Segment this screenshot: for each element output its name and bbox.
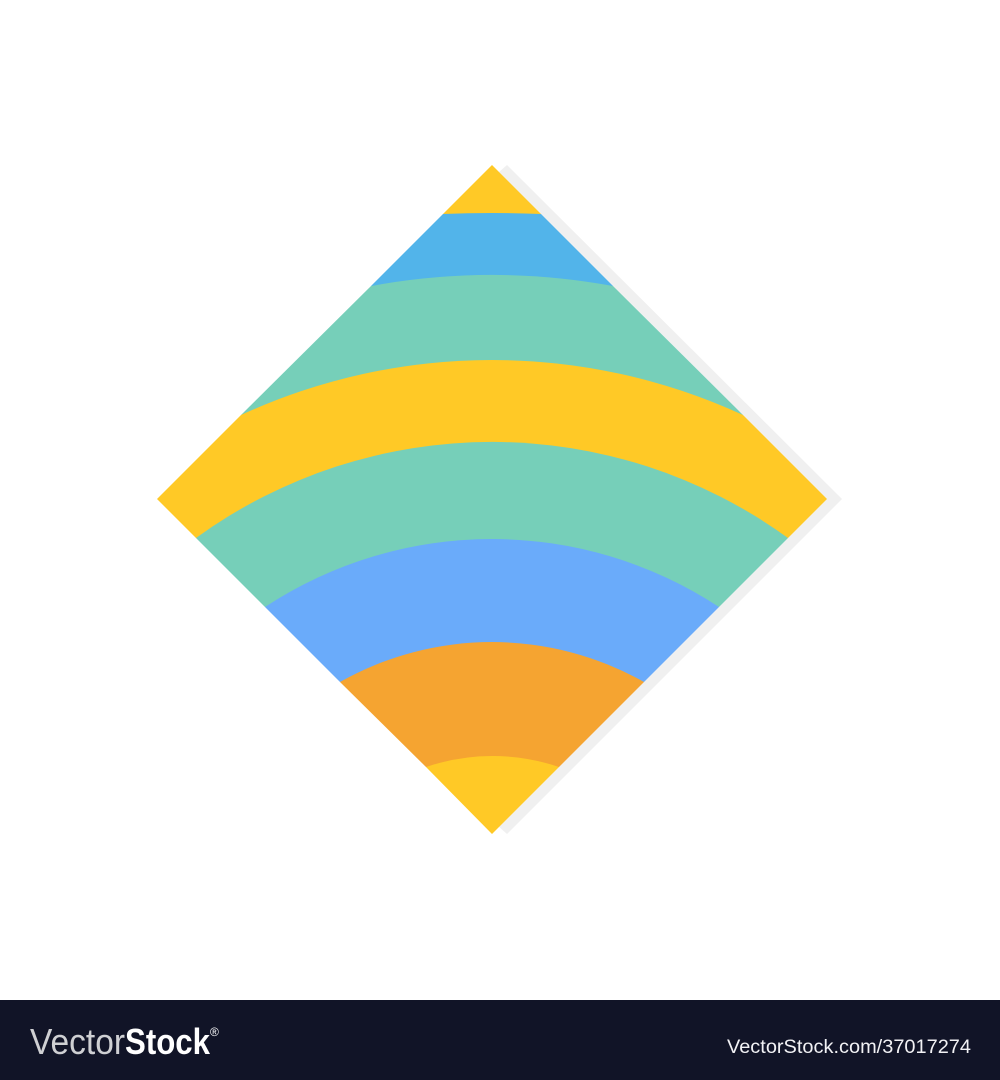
footer bar xyxy=(0,1000,1000,1080)
band: middle yellow xyxy=(157,360,827,538)
striped diamond xyxy=(157,165,827,834)
footer image id: VectorStock.com/37017274 xyxy=(727,1037,971,1058)
footer logo: VectorStock xyxy=(30,1021,211,1062)
band: lower green xyxy=(196,442,788,607)
band: periwinkle blue xyxy=(265,539,719,682)
diamond shadow xyxy=(491,165,842,834)
band: upper green xyxy=(241,275,743,415)
band: sky blue xyxy=(371,213,613,286)
band: orange xyxy=(340,642,644,767)
band: top yellow xyxy=(443,165,541,214)
band: bottom yellow xyxy=(426,756,559,834)
registered mark: ® xyxy=(210,1025,219,1039)
